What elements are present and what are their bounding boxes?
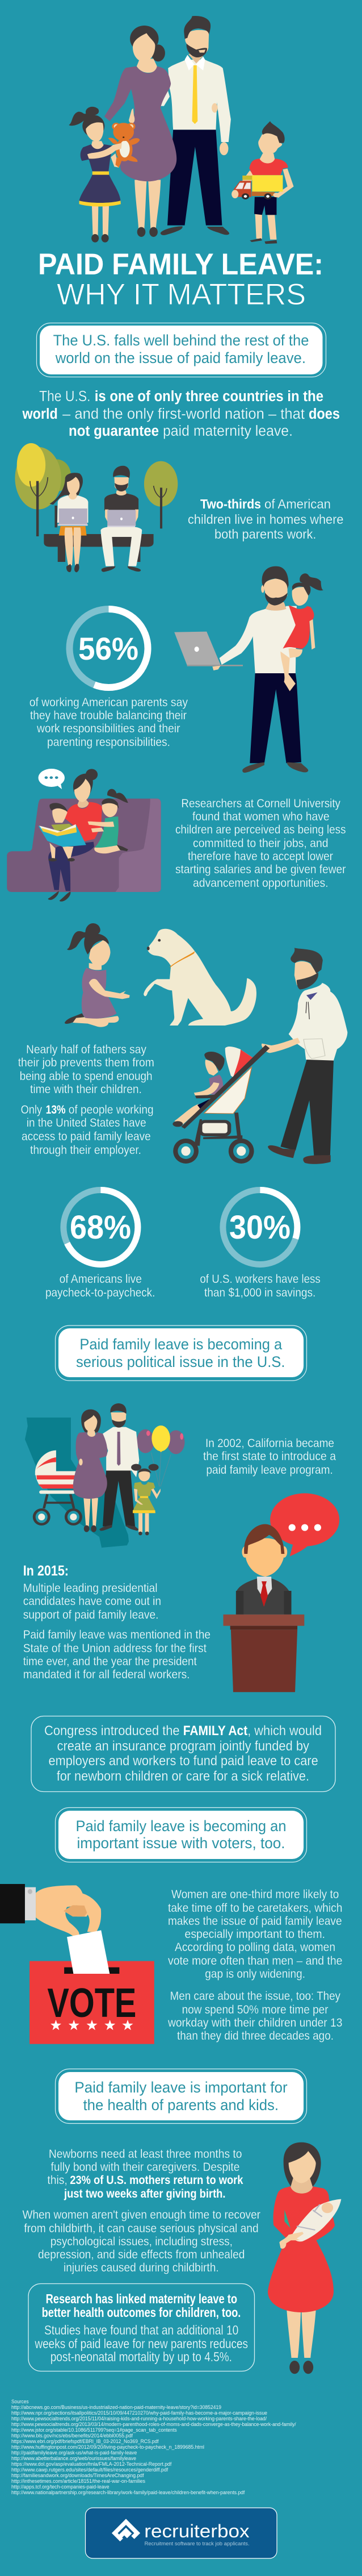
text block: three countries (22, 389, 340, 439)
stat: 30% savings: than $1,000 in savings. (204, 1286, 315, 1299)
text block: newborns and recovery: Newborns need at least three months to (49, 2147, 242, 2161)
sources list: http://apps.tcf.org/tech-companies-paid-leave (11, 2484, 110, 2490)
text block: women and men voters (167, 1887, 342, 2043)
illustration: family of four (69, 16, 294, 244)
text block: three countries: world (22, 406, 58, 422)
text block: California 2002: In 2002, California became (205, 1436, 334, 1450)
text block: Cornell researchers (175, 797, 346, 890)
sources list: http://www.bls.gov/ncs/ebs/benefits/2014/ebbl0055.pdf (11, 2433, 133, 2439)
father figure (161, 16, 231, 235)
mother hand (129, 109, 134, 123)
text block: newborns and recovery: psychological issues, including stress, (50, 2235, 233, 2248)
text block: women and men voters: Men care about the issue, too: They (170, 1989, 340, 2003)
newborn baby (292, 2199, 341, 2241)
footer logo panel: Recruitment software to track job applicants. (145, 2541, 250, 2547)
illustration: vote box: VOTE (47, 1981, 136, 2026)
text block: three countries: does (309, 406, 340, 422)
text block: women and men voters: workday with their children under 13 (167, 2016, 342, 2029)
stat: 68% paycheck to paycheck (45, 1190, 155, 1299)
sources list: http://www.jstor.org/stable/10.1086/511799?seq=1#page_scan_tab_contents (11, 2427, 177, 2433)
text block: newborns and recovery: depression, and side effects from unhealed (38, 2248, 245, 2261)
text block: newborns and recovery: from childbirth, it can cause serious physical and (24, 2221, 259, 2235)
illustration: father with laptop holding daughter (174, 566, 324, 773)
text block: two-thirds: Two-thirds (200, 497, 261, 511)
stat: 30% savings: of U.S. workers have less (200, 1272, 321, 1286)
boy with toy truck (231, 121, 294, 244)
text block: 2015 events: Multiple leading presidential (23, 1581, 158, 1595)
panel: maternity leave research: better health outcomes for children, too. (42, 2305, 241, 2320)
text block: California 2002: paid family leave program. (206, 1463, 333, 1477)
text block: three countries: is one of only three countries in the (95, 389, 323, 405)
illustration: parents on bench with laptops (15, 443, 178, 572)
bench (44, 534, 154, 562)
callout: health of parents and kids (56, 2069, 306, 2124)
stat: 56% of working parents: 56% (78, 631, 138, 666)
callout: U.S. falls behind: world on the issue of paid family leave. (55, 349, 306, 366)
text block: 2015 events: candidates have come out in (23, 1594, 161, 1608)
text block: California 2002 (203, 1436, 336, 1477)
text block: women and men voters: makes the issue of paid family leave (168, 1914, 342, 1928)
panel: FAMILY Act: for newborn children or care for a sick relative. (57, 1769, 309, 1784)
illustration: mother reading on couch (7, 769, 161, 902)
text block: Cornell researchers: therefore have to accept lower (188, 849, 333, 863)
text block: 2015 events: support of paid family leave. (23, 1608, 159, 1622)
text block: two-thirds: of American (264, 497, 331, 511)
text block: Cornell researchers: advancement opportunities. (193, 876, 329, 890)
sources list: http://www.abetterbalance.org/web/ourissues/familyleave (11, 2456, 136, 2461)
panel: FAMILY Act: , which would (247, 1723, 322, 1739)
illustration: mother holding newborn (268, 2143, 341, 2374)
callout: issue with voters (56, 1808, 306, 1862)
callout: health of parents and kids: Paid family leave is important for (74, 2079, 288, 2096)
panel: maternity leave research: weeks of paid leave for new parents reduces (35, 2336, 248, 2351)
stat: 56% of working parents: work responsibilities and their (36, 722, 180, 735)
callout: political issue (56, 1325, 306, 1381)
illustration: father pushing stroller (172, 948, 347, 1164)
father (262, 948, 347, 1164)
sources list: https://www.ebri.org/pdf/briefspdf/EBRI_IB_03-2012_No369_RCS.pdf (11, 2439, 159, 2444)
title: PAID FAMILY LEAVE: (38, 248, 323, 281)
panel: maternity leave research (28, 2284, 254, 2371)
stat: 30% savings (200, 1190, 321, 1299)
text block: 2015 events: Paid family leave was mentioned in the (23, 1628, 211, 1641)
title: WHY IT MATTERS (57, 278, 306, 311)
stat: 30% savings: 30% (229, 1209, 291, 1246)
callout: issue with voters: Paid family leave is becoming an (76, 1818, 286, 1835)
girl with balloons (131, 1464, 161, 1535)
text block: fathers and 13%: 13% (46, 1103, 66, 1116)
text block: newborns and recovery: fully bond with their caregivers. Despite (51, 2160, 239, 2174)
text block: 2015 events: In 2015: (23, 1563, 69, 1579)
woman with laptop (49, 473, 88, 572)
text block: three countries: paid maternity leave. (163, 423, 293, 439)
panel: maternity leave research: post-neonatal mortality by up to 4.5%. (50, 2349, 232, 2364)
sources list: http://www.pewsocialtrends.org/2013/03/14/modern-parenthood-roles-of-moms-and-dads-converge-as-they-balance-work-and-family/ (11, 2421, 296, 2427)
footer logo panel: recruiterbox (144, 2521, 250, 2541)
laptop (174, 632, 243, 670)
sources list: http://paidfamilyleave.org/ask-us/what-is-paid-family-leave (11, 2450, 137, 2456)
sources list: http://www.pewsocialtrends.org/2015/11/04/raising-kids-and-running-a-household-how-working-parents-share-the-load/ (11, 2416, 267, 2421)
text block: fathers and 13%: Nearly half of fathers say (26, 1043, 146, 1056)
text block: 2015 events (23, 1563, 211, 1681)
dog (144, 929, 256, 1026)
stat: 68% paycheck to paycheck: of Americans live (60, 1272, 142, 1286)
sources list: http://familiesandwork.org/downloads/TimesAreChanging.pdf (11, 2473, 144, 2478)
text block: California 2002: the first state to introduce a (203, 1449, 336, 1463)
mother figure (130, 26, 165, 237)
California map (25, 1418, 129, 1548)
sources list (11, 2399, 296, 2495)
illustration: California family (25, 1403, 185, 1548)
mother dress (104, 66, 176, 181)
daughter (280, 573, 324, 691)
illustration: speaker at podium (223, 1493, 339, 1692)
callout: health of parents and kids: the health of parents and kids. (83, 2096, 279, 2114)
text block: fathers and 13%: access to paid family leave (22, 1129, 151, 1143)
trees (15, 443, 178, 536)
sources list: Sources (11, 2399, 29, 2404)
mother (48, 769, 102, 902)
callout: political issue: serious political issue in the U.S. (76, 1353, 285, 1370)
panel: FAMILY Act (31, 1716, 335, 1792)
stat: 56% of working parents: they have trouble balancing their (30, 708, 187, 722)
text block: three countries: – and the only first-world nation – that (62, 406, 305, 422)
girl kneeling (65, 923, 130, 1027)
text block: Cornell researchers: found that women who have (192, 810, 330, 823)
text block: fathers and 13%: Only (21, 1103, 42, 1116)
father (99, 1403, 139, 1531)
text block: women and men voters: vote more often than men – and the (168, 1954, 342, 1968)
text block: newborns and recovery: 23% of U.S. mothers return to work (70, 2173, 243, 2187)
text block: fathers and 13%: time with their children. (30, 1082, 142, 1096)
panel: maternity leave research: Studies have found that an additional 10 (44, 2323, 238, 2337)
text block: 2015 events: time ever, and the year the president (23, 1654, 197, 1668)
text block: women and men voters: now spend 50% more time per (182, 2003, 329, 2016)
sources list: http://abcnews.go.com/Business/us-industrialized-nation-paid-maternity-leave/story?id=30852419 (11, 2404, 221, 2410)
sources list: http://www.npr.org/sections/itsallpolitics/2015/10/09/447210270/why-paid-family-has-become-a-major-campaign-issue (11, 2410, 267, 2416)
text block: fathers and 13%: through their employer. (30, 1143, 141, 1157)
text block: 2015 events: State of the Union address for the first (23, 1641, 207, 1655)
text block: women and men voters: Women are one-third more likely to (171, 1887, 339, 1901)
callout: U.S. falls behind (36, 323, 326, 377)
boy and book (38, 803, 86, 861)
speech bubble (270, 1493, 339, 1556)
callout: U.S. falls behind: The U.S. falls well behind the rest of the (53, 332, 309, 349)
text block: newborns and recovery: just two weeks after giving birth. (64, 2187, 225, 2200)
girl leaning (88, 789, 128, 853)
text block: newborns and recovery (23, 2147, 260, 2274)
callout: political issue: Paid family leave is becoming a (79, 1336, 283, 1353)
sources list: http://www.cawp.rutgers.edu/sites/default/files/resources/genderdiff.pdf (11, 2467, 169, 2473)
speech bubble (39, 769, 65, 789)
podium (223, 1615, 304, 1692)
balloons (137, 1425, 185, 1487)
stat: 56% of working parents: of working American parents say (30, 695, 188, 709)
sources list: http://www.nationalpartnership.org/research-library/work-family/paid-leave/children-benefit-when-parents.pdf (11, 2490, 245, 2495)
footer logo panel (85, 2508, 277, 2558)
mother (73, 1410, 107, 1532)
sources list: https://www.dol.gov/asp/evaluation/fmla/FMLA-2012-Technical-Report.pdf (11, 2461, 172, 2467)
text block: women and men voters: especially important to them. (185, 1927, 325, 1941)
text block: newborns and recovery: When women aren't given enough time to recover (23, 2208, 260, 2221)
girl arm (87, 143, 122, 159)
text block: three countries: not guarantee (69, 423, 159, 439)
girl figure (69, 107, 121, 243)
panel: FAMILY Act: Congress introduced the (44, 1723, 180, 1739)
callout: issue with voters: important issue with voters, too. (77, 1835, 285, 1852)
text block: fathers and 13% (18, 1043, 154, 1157)
text block: newborns and recovery: injuries caused during childbirth. (64, 2261, 219, 2274)
panel: FAMILY Act: employers and workers to fund paid leave to care (49, 1753, 318, 1769)
title (38, 248, 323, 311)
sources list: http://www.huffingtonpost.com/2012/09/20/living-paycheck-to-paycheck_n_1899685.html (11, 2444, 204, 2450)
couch (7, 799, 161, 892)
panel: maternity leave research: Research has linked maternity leave to (46, 2291, 237, 2306)
speaker (236, 1524, 292, 1615)
icon: recruiterbox diamond (115, 2522, 137, 2544)
text block: newborns and recovery: this, (47, 2173, 68, 2187)
text block: fathers and 13%: of people working (69, 1103, 154, 1116)
stat: 56% of working parents (30, 609, 188, 749)
text block: women and men voters: According to polling data, women (175, 1940, 335, 1954)
panel: FAMILY Act: FAMILY Act (183, 1723, 247, 1739)
text block: fathers and 13%: their job prevents them from (18, 1056, 154, 1069)
father body (220, 566, 308, 773)
stat: 68% paycheck to paycheck: paycheck-to-paycheck. (45, 1286, 155, 1299)
text block: 2015 events: mandated it for all federal workers. (23, 1668, 190, 1681)
hand and ballot (0, 1884, 154, 2044)
text block: Cornell researchers: committed to their jobs, and (193, 836, 329, 850)
text block: women and men voters: gap is only widening. (205, 1967, 305, 1981)
panel: FAMILY Act: create an insurance program jointly funded by (57, 1739, 309, 1754)
illustration: vote box (0, 1884, 154, 2044)
text block: two-thirds: both parents work. (214, 527, 317, 541)
text block: three countries: The U.S. (39, 389, 91, 405)
stroller (172, 1045, 270, 1164)
illustration: girl and dog (65, 923, 256, 1027)
stat: 68% paycheck to paycheck: 68% (70, 1209, 131, 1246)
man with laptop (100, 466, 142, 572)
text block: Cornell researchers: Researchers at Cornell University (181, 797, 340, 810)
teddy bear (108, 123, 140, 168)
pram (33, 1450, 82, 1525)
stars (50, 2020, 133, 2030)
text block: fathers and 13%: being able to spend enough (20, 1069, 153, 1083)
text block: two-thirds (188, 497, 344, 541)
text block: fathers and 13%: in the United States have (27, 1116, 146, 1129)
text block: Cornell researchers: starting salaries and be given fewer (175, 862, 346, 876)
stat: 56% of working parents: parenting responsibilities. (47, 735, 170, 749)
text block: two-thirds: children live in homes where (188, 512, 344, 527)
sources list: http://inthesetimes.com/article/18151/the-real-war-on-families (11, 2478, 146, 2484)
text block: women and men voters: take time off to be caretakers, which (168, 1901, 342, 1915)
text block: women and men voters: than they did three decades ago. (177, 2029, 334, 2043)
